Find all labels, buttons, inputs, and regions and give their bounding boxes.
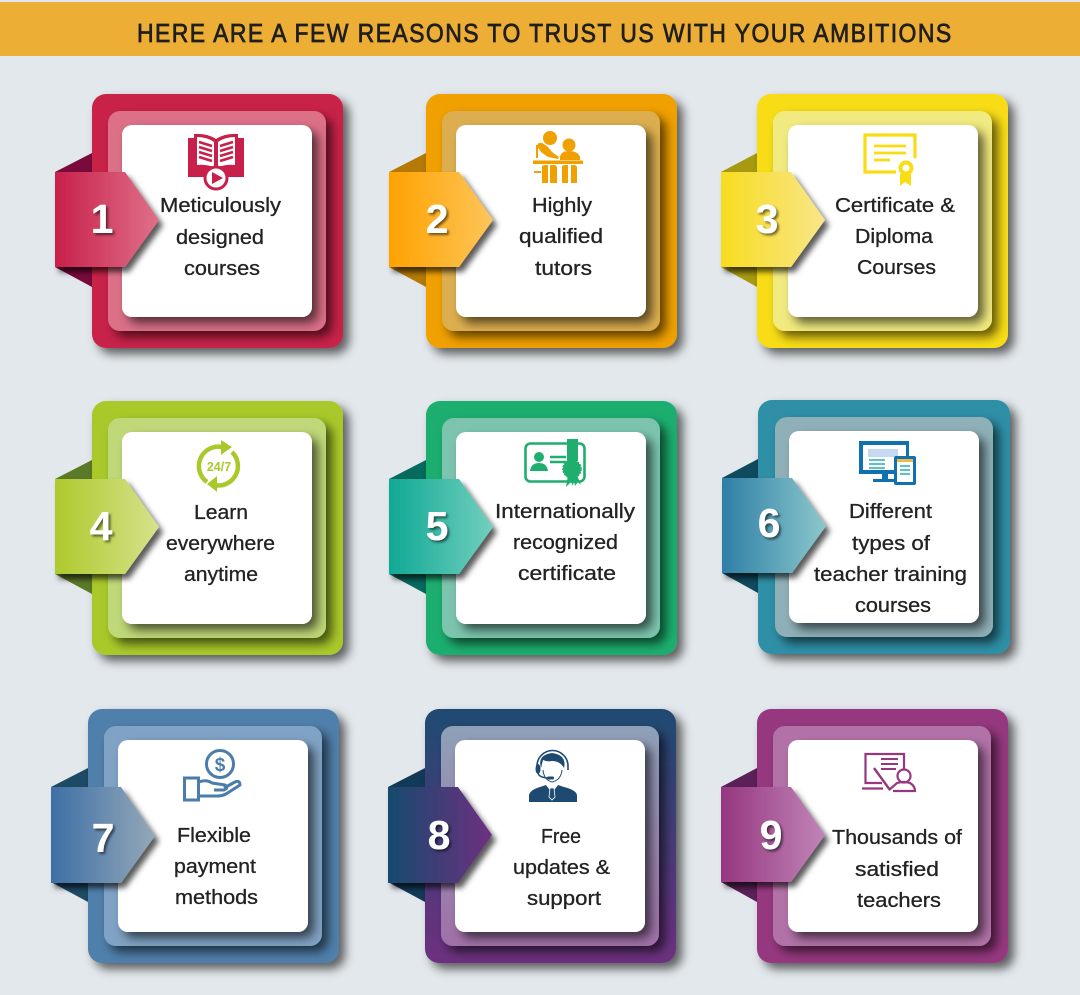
icon: monitor and tablet (859, 441, 916, 485)
text: card 7: payment (174, 856, 256, 878)
text: card 2 (519, 195, 603, 280)
number 2: 2 (426, 196, 448, 242)
number 1: 1 (91, 196, 113, 242)
text: card 8 (513, 826, 611, 910)
number 8: 8 (428, 812, 450, 858)
text: card 4: everywhere (166, 533, 275, 555)
text: card 7 (174, 825, 258, 909)
panel: 4 learn everywhere anytime (55, 401, 343, 655)
text: card 7: Flexible (177, 825, 251, 847)
text: card 7: methods (175, 887, 258, 909)
number 7: 7 (92, 815, 114, 861)
panel: 3 certificate and diploma courses (721, 94, 1008, 348)
text: card 1 (160, 195, 281, 280)
text: card 1: courses (184, 258, 260, 280)
text: card 8: updates & (513, 857, 611, 879)
text: card 8: support (527, 888, 601, 910)
icon: certificate (865, 135, 915, 186)
number 3: 3 (756, 196, 778, 242)
text: card 5: certificate (518, 563, 616, 585)
number 4: 4 (90, 503, 113, 549)
text: card 4: Learn (194, 502, 248, 524)
icon: hand with coin (184, 750, 240, 800)
text: card 9: satisfied (855, 859, 939, 881)
icon: book with play button (188, 134, 244, 189)
text: card 5: Internationally (495, 501, 635, 523)
icon: support agent with headset (529, 750, 577, 802)
text: card 9 (832, 827, 962, 912)
panel: 9 thousands of satisfied teachers (721, 709, 1008, 963)
panel: 6 different types of teacher training courses (722, 400, 1010, 654)
text: card 3: Certificate & (835, 195, 956, 217)
text: card 6: types of (852, 533, 930, 555)
icon: tutors at desk (533, 131, 583, 183)
title banner (0, 2, 1080, 56)
icon: hand with coin: $ (215, 755, 226, 776)
text: card 3 (835, 195, 956, 279)
text: card 3: Courses (857, 257, 936, 279)
text: card 5: recognized (513, 532, 618, 554)
text: card 9: Thousands of (832, 827, 962, 849)
icon: id certificate with seal (526, 439, 584, 487)
icon: teacher at board (862, 754, 915, 791)
panel: 8 free updates and support (388, 709, 676, 963)
panel: 2 highly qualified tutors (389, 94, 677, 348)
text: card 2: tutors (535, 258, 592, 280)
icon: 24/7 cycle: 24/7 (207, 460, 231, 474)
text: card 2: Highly (532, 195, 592, 217)
text: card 8: Free (541, 826, 581, 848)
text: card 6: teacher training (814, 564, 967, 586)
text: card 4: anytime (184, 564, 258, 586)
text: card 6: Different (849, 501, 932, 523)
panel: 7 flexible payment methods (51, 709, 339, 963)
panel: 5 internationally recognized certificate (389, 401, 677, 655)
text: card 6: courses (855, 595, 931, 617)
title: HERE ARE A FEW REASONS TO TRUST US WITH YOUR AMBITIONS (137, 20, 951, 48)
text: card 6 (814, 501, 967, 617)
text: card 4 (166, 502, 275, 586)
text: card 1: Meticulously (160, 195, 281, 217)
number 9: 9 (760, 812, 782, 858)
text: card 9: teachers (857, 890, 941, 912)
text: card 5 (495, 501, 635, 585)
number 6: 6 (758, 500, 780, 546)
text: card 3: Diploma (855, 226, 934, 248)
icon: 24/7 cycle (199, 440, 238, 492)
text: card 1: designed (176, 227, 264, 249)
number 5: 5 (426, 503, 448, 549)
panel: 1 meticulously designed courses (55, 94, 343, 348)
text: card 2: qualified (519, 226, 603, 248)
